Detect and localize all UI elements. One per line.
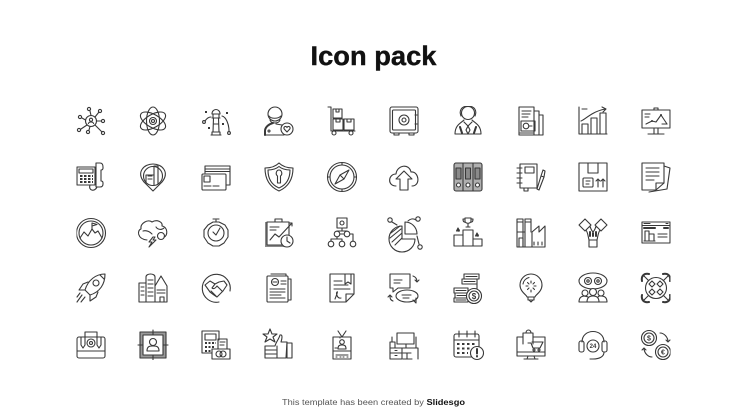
icon: currency exchange: € [661, 350, 665, 356]
icon grid [76, 106, 670, 360]
icon: resume [267, 274, 291, 302]
icon: storm cloud [139, 221, 167, 247]
icon: browser window [642, 222, 670, 243]
icon: map pin with building [141, 164, 165, 191]
icon: safe [390, 107, 418, 135]
icon: stopwatch gear [204, 219, 228, 246]
icon: thumbs up with star [263, 329, 292, 358]
icon: lighthouse [203, 110, 230, 135]
icon: growth bar chart [579, 107, 607, 134]
icon: binders [454, 163, 482, 191]
icon: team with gears [579, 273, 607, 302]
icon: person with mask and heart [265, 107, 293, 135]
icon: contract [330, 274, 354, 302]
icon: org chart [328, 218, 356, 247]
icon: factory [517, 219, 545, 247]
icon: sticky notes [642, 163, 670, 192]
icon: shield with keyhole [265, 163, 293, 191]
icon: cloud upload [390, 166, 418, 190]
icon: pie chart [388, 217, 422, 252]
icon: cardboard box [579, 163, 607, 191]
icon: mountain gauge [76, 218, 106, 248]
icon: ID badge [333, 331, 351, 359]
icon: clipboard with clock [265, 219, 293, 247]
icon: credit cards [202, 166, 230, 190]
icon: trolley with boxes [328, 107, 355, 135]
title: Icon pack [310, 41, 437, 71]
icon: framed portrait [138, 330, 168, 360]
icon: teamwork hands [579, 219, 607, 247]
icon: desk phone [77, 163, 103, 190]
icon: online shopping monitor [517, 330, 545, 359]
icon: chat bubbles [388, 274, 419, 303]
icon: currency exchange [642, 330, 670, 360]
icon: city buildings [139, 274, 167, 302]
icon: coin stack [454, 274, 482, 304]
icon: money briefcase [77, 332, 105, 358]
icon: rocket [77, 274, 105, 302]
icon: documents [519, 107, 543, 135]
icon: compass [328, 162, 356, 192]
icon: calendar alert [454, 331, 484, 360]
icon: atom [138, 107, 168, 135]
icon: four-way diamond [642, 274, 670, 302]
footer credit: This template has been created by Slidesgo [282, 398, 465, 407]
icon: calculator and cash [202, 331, 230, 359]
icon: coin stack: $ [472, 292, 477, 301]
icon: light bulb [520, 274, 542, 302]
icon: office desk [390, 333, 418, 359]
icon: 24h headset: 24 [590, 344, 597, 350]
icon: podium and trophy [454, 218, 482, 246]
icon: businesswoman [455, 106, 481, 134]
icon: network [77, 107, 105, 135]
icon: currency exchange: $ [647, 336, 651, 342]
icon: 24h headset [579, 332, 607, 359]
icon: handshake [202, 274, 230, 302]
icon: notebook and pen [517, 164, 545, 191]
icon: presentation board [642, 108, 670, 134]
